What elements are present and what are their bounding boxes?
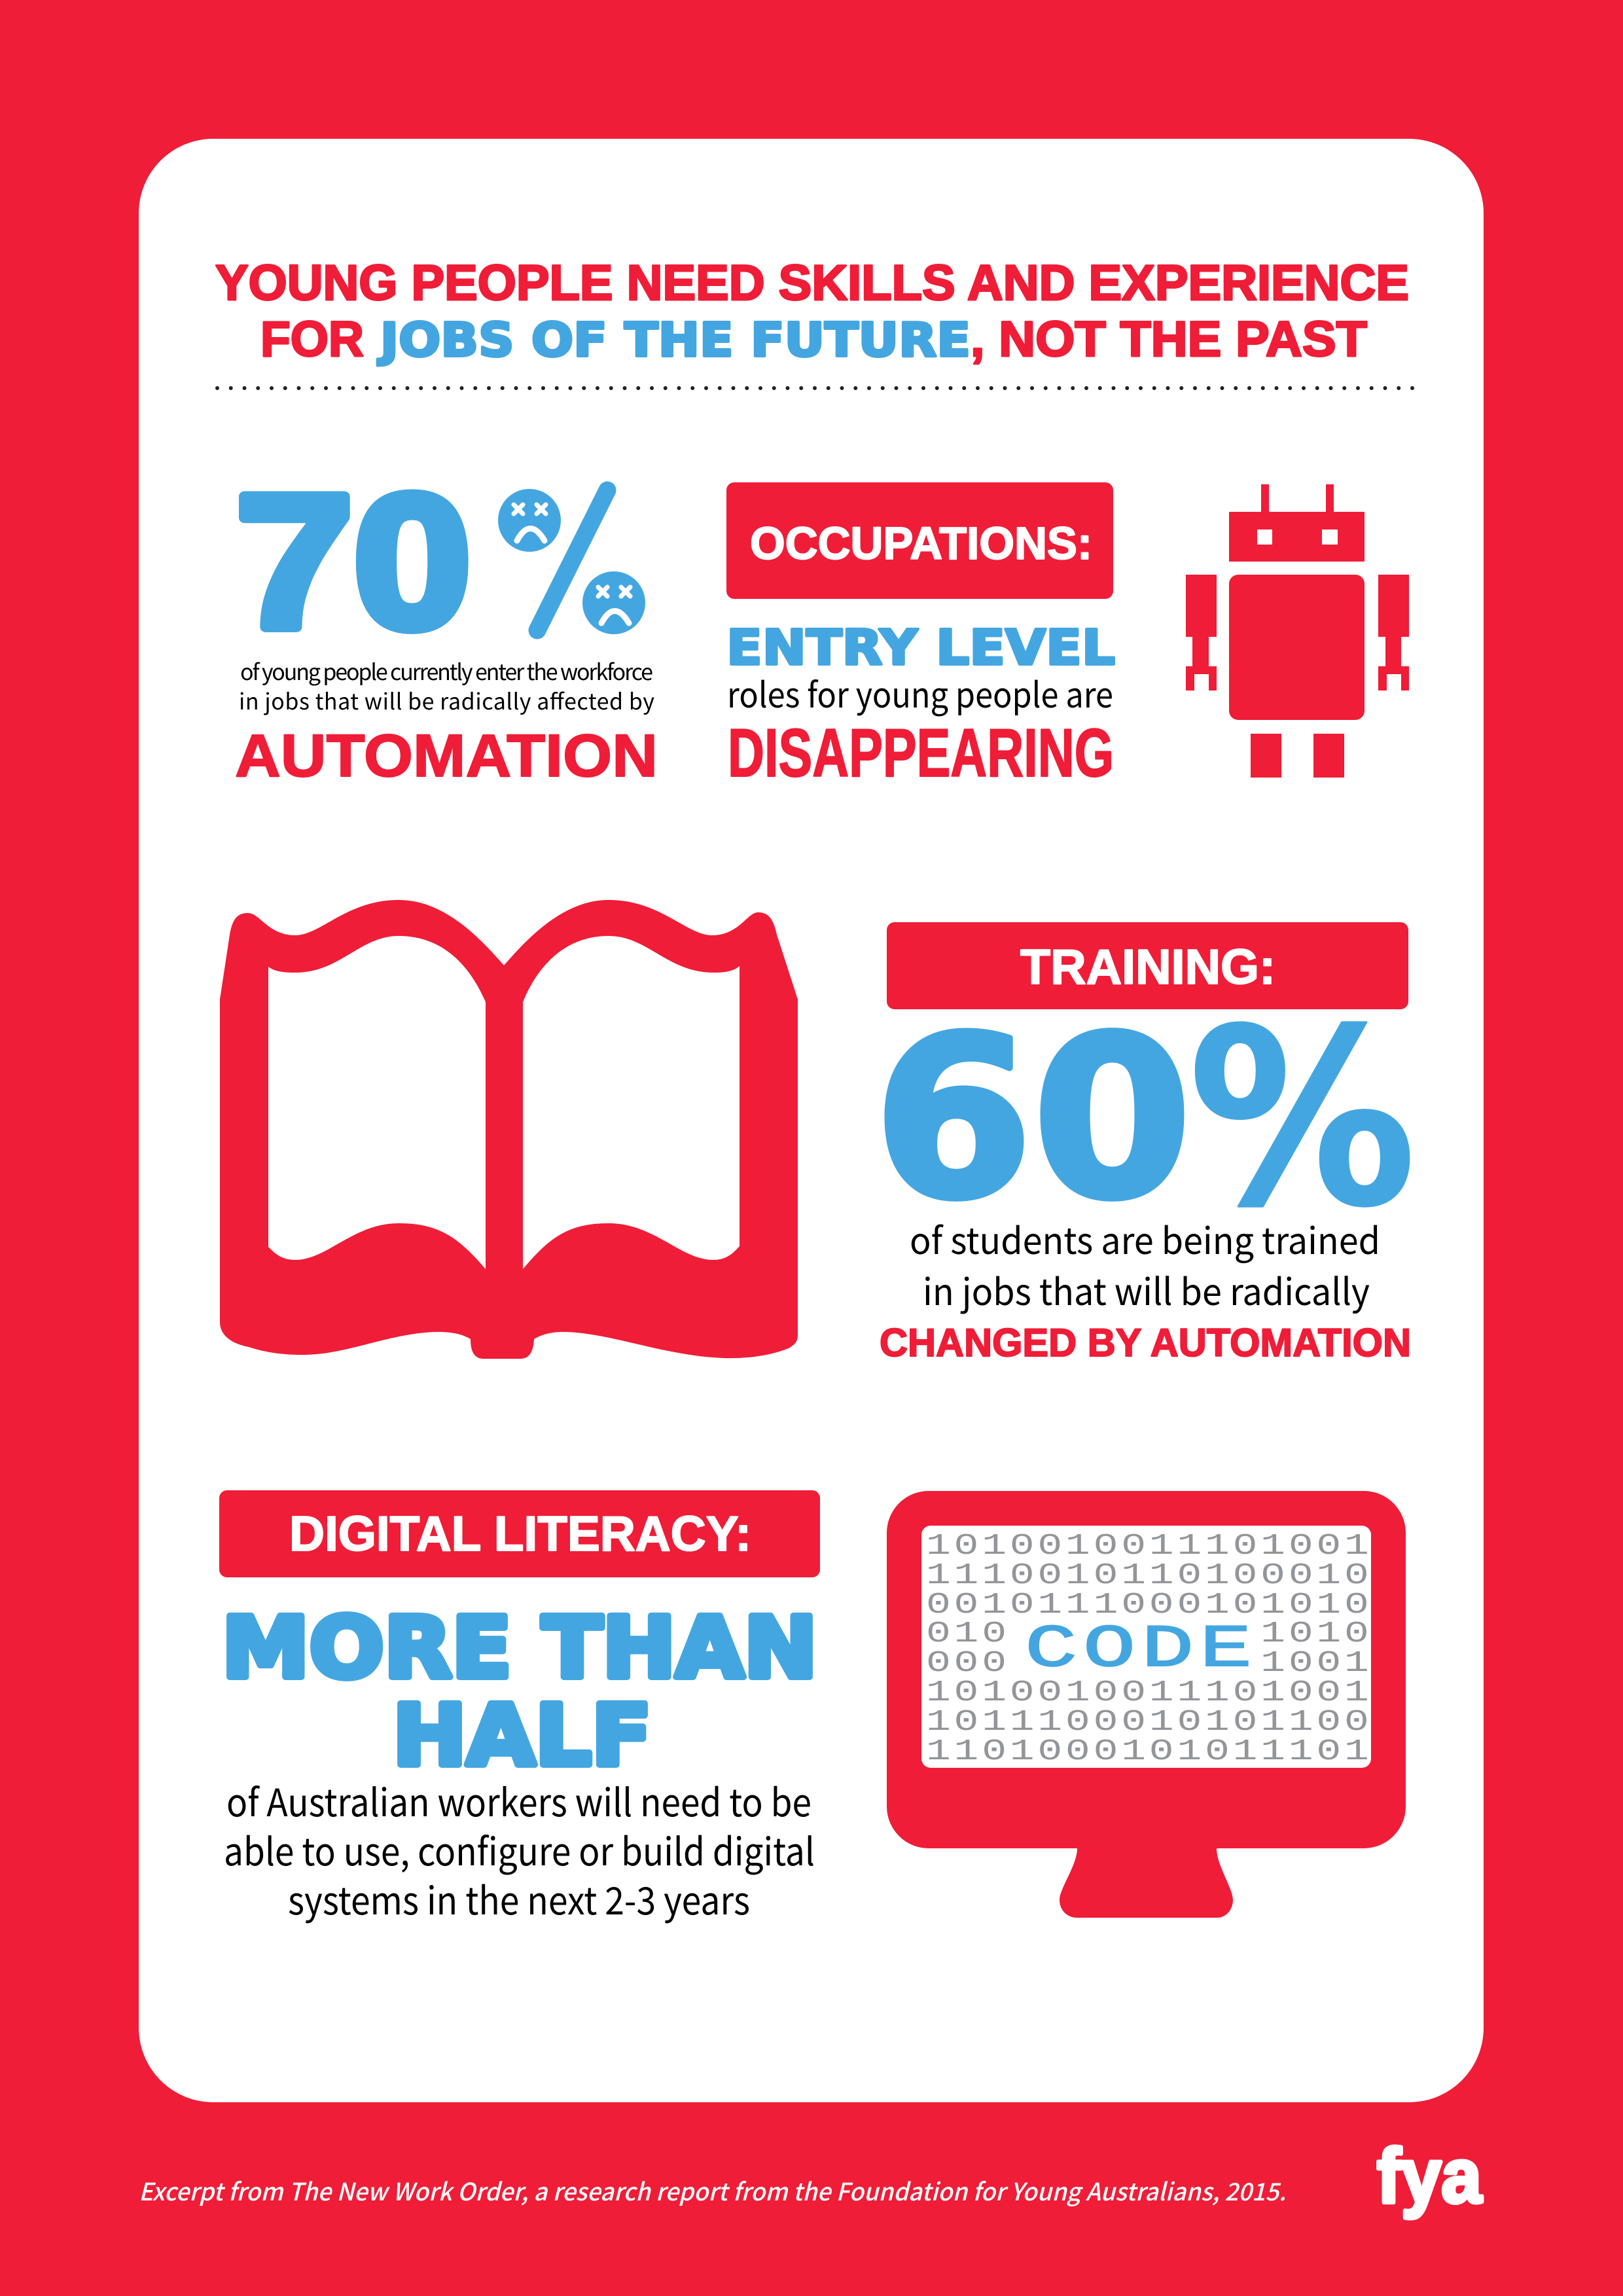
icon: percent sign with sad faces (498, 489, 645, 634)
footer source note: Excerpt from The New Work Order, a research report from the Foundation for Young Australians, 2015. (139, 2172, 1286, 2208)
text: students description: in jobs that will be radically (923, 1263, 1370, 1316)
code label: CODE (1025, 1617, 1252, 1684)
binary digits: 0001001 (926, 1647, 1369, 1680)
heading: entry level: ENTRY LEVEL (726, 620, 1115, 676)
title: , NOT THE PAST (971, 312, 1367, 367)
big number 60%: % (1188, 977, 1416, 1261)
heading: more than half: MORE THAN (222, 1600, 817, 1697)
binary digits: 1110010110100010 (926, 1559, 1369, 1592)
title: YOUNG PEOPLE NEED SKILLS AND EXPERIENCE (215, 255, 1409, 311)
big number 60% (874, 977, 1416, 1261)
binary digits (926, 1530, 1369, 1768)
text: automation description: in jobs that will be radically affected by (239, 684, 654, 716)
title: JOBS OF THE FUTURE (378, 313, 971, 367)
heading: more than half (222, 1600, 817, 1785)
binary digits: 1010010011101001 (926, 1676, 1369, 1710)
label: occupations: OCCUPATIONS: (750, 518, 1092, 569)
icon: open book (220, 900, 798, 1359)
panel: occupations (726, 482, 1115, 791)
heading: automation: AUTOMATION (235, 723, 658, 789)
heading: more than half: HALF (393, 1687, 652, 1785)
panel: digital literacy (219, 1490, 820, 1926)
heading: changed by automation: CHANGED BY AUTOMATION (880, 1321, 1411, 1365)
text: australian workers description (224, 1772, 815, 1926)
label: digital literacy: DIGITAL LITERACY: (289, 1506, 751, 1561)
binary digits: 1011100010101100 (926, 1706, 1369, 1739)
panel: white card (139, 139, 1484, 2102)
big number 70: 70 (236, 456, 471, 668)
text: australian workers description: systems in the next 2-3 years (288, 1871, 750, 1926)
text: automation description: of young people currently enter the workforce (240, 655, 653, 687)
binary digits: 1010010011101001 (926, 1530, 1369, 1563)
text: roles for young people are: roles for young people are (727, 668, 1113, 718)
label: digital literacy (219, 1490, 820, 1577)
binary digits: 0010111000101010 (926, 1588, 1369, 1622)
binary digits: 1101000101011101 (926, 1735, 1369, 1768)
text: students description (910, 1212, 1380, 1316)
logo: fya: fya (1377, 2133, 1482, 2219)
icon: computer monitor with code (887, 1491, 1406, 1918)
title: FOR (260, 312, 364, 367)
binary digits: 0101010 (926, 1617, 1369, 1651)
text: australian workers description: able to use, configure or build digital (224, 1821, 815, 1876)
panel: automation statistic (235, 456, 658, 789)
monitor screen (921, 1526, 1371, 1768)
title (215, 255, 1409, 367)
label: training: TRAINING: (1020, 939, 1275, 994)
label: training (887, 922, 1408, 1009)
heading: disappearing: DISAPPEARING (728, 715, 1114, 791)
label: occupations (726, 482, 1113, 599)
monitor body (887, 1491, 1406, 1918)
big number 60%: 60 (874, 990, 1192, 1247)
text: automation description (239, 655, 654, 716)
panel: training (874, 922, 1416, 1365)
text: australian workers description: of Australian workers will need to be (226, 1772, 812, 1827)
icon: robot (1186, 484, 1409, 778)
text: students description: of students are being trained (910, 1212, 1380, 1265)
